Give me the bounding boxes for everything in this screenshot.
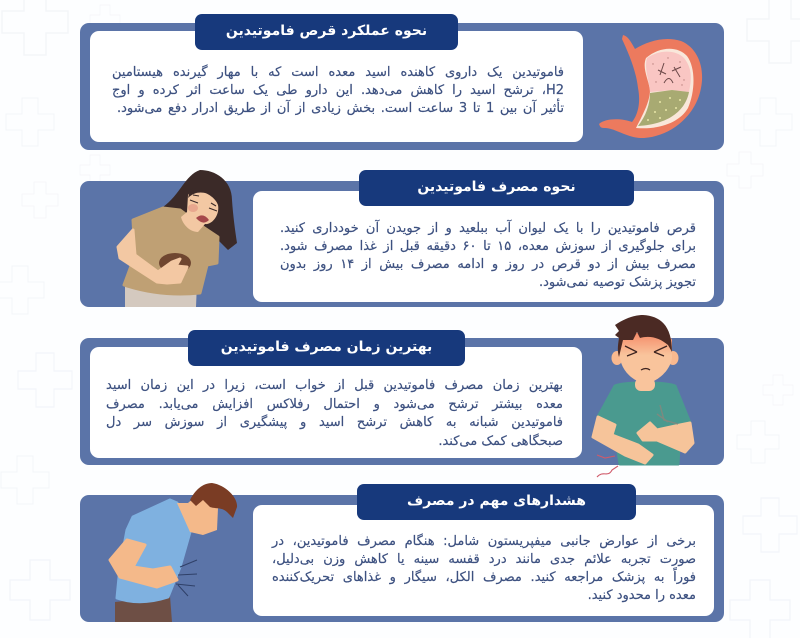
heading: best time (188, 330, 465, 366)
text box: mechanism (90, 31, 583, 142)
text block: warnings: معده را محدود کنید. (588, 588, 696, 603)
heading: mechanism (195, 14, 458, 50)
text block: mechanism: تأثیر آن بین 1 تا 3 ساعت است. بخش زیادی از آن از طریق ادرار دفع می‌شود. (117, 101, 564, 116)
text block: best time: فاموتیدین شبانه به کاهش ترشح اسید و پیشگیری از سوزش سر دل (106, 415, 563, 430)
text block: mechanism (112, 64, 564, 116)
text block: mechanism: فاموتیدین یک داروی کاهنده اسید معده است که با مهار گیرنده هیستامین (112, 65, 564, 80)
panel: mechanism of action (80, 23, 724, 150)
text block: how to take: تجویز پزشک توصیه نمی‌شود. (539, 275, 696, 290)
text block: warnings: برخی از عوارض جانبی میفپریستون شامل: هنگام مصرف فاموتیدین، در (272, 534, 696, 549)
heading: warnings (357, 484, 636, 520)
panel: how to take (80, 181, 724, 307)
icon: stomach (599, 35, 702, 138)
text block: mechanism: H2، ترشح اسید را کاهش می‌دهد. این دارو طی یک ساعت اثر کرده و اوج (112, 83, 564, 98)
panel: best time (80, 338, 724, 465)
heading: best time: بهترین زمان مصرف فاموتیدین (221, 339, 432, 355)
text block: best time (106, 378, 563, 448)
text box: how to take (253, 191, 714, 302)
heading: how to take (359, 170, 634, 206)
text block: warnings: صورت تجربه علائم جدی مانند درد قفسه سینه یا کاهش وزن بی‌دلیل، (272, 552, 696, 567)
text box: warnings (253, 505, 714, 616)
text block: best time: صبحگاهی کمک می‌کند. (438, 434, 563, 448)
text block: best time: بهترین زمان مصرف فاموتیدین قبل از خواب است، زیرا در این زمان اسید (106, 378, 563, 393)
panel: warnings (80, 495, 724, 622)
text block: how to take (280, 219, 696, 290)
text block: how to take: برای جلوگیری از سوزش معده، ۱۵ تا ۶۰ دقیقه قبل از غذا مصرف شود. (280, 239, 696, 254)
illustration: man holding stomach (108, 483, 238, 622)
heading: warnings: هشدارهای مهم در مصرف (407, 493, 586, 509)
text block: how to take: مصرف بیش از دو قرص در روز و ادامه مصرف بیش از ۱۴ روز بدون (280, 257, 696, 272)
illustration: boy with stomach ache (592, 315, 694, 478)
heading: mechanism: نحوه عملکرد قرص فاموتیدین (226, 23, 427, 39)
text box: best time (90, 347, 582, 458)
text block: warnings: فوراً به پزشک مراجعه کنید. مصرف الکل، سیگار و غذاهای تحریک‌کننده (272, 570, 696, 585)
text block: how to take: قرص فاموتیدین را با یک لیوان آب ببلعید و از جویدن آن خودداری کنید. (280, 221, 696, 236)
text block: best time: معده بیشتر ترشح می‌شود و احتمال رفلاکس افزایش می‌یابد. مصرف (106, 396, 563, 412)
illustration: woman holding stomach (116, 170, 237, 307)
heading: how to take: نحوه مصرف فاموتیدین (417, 179, 576, 195)
text block: warnings (271, 533, 696, 603)
